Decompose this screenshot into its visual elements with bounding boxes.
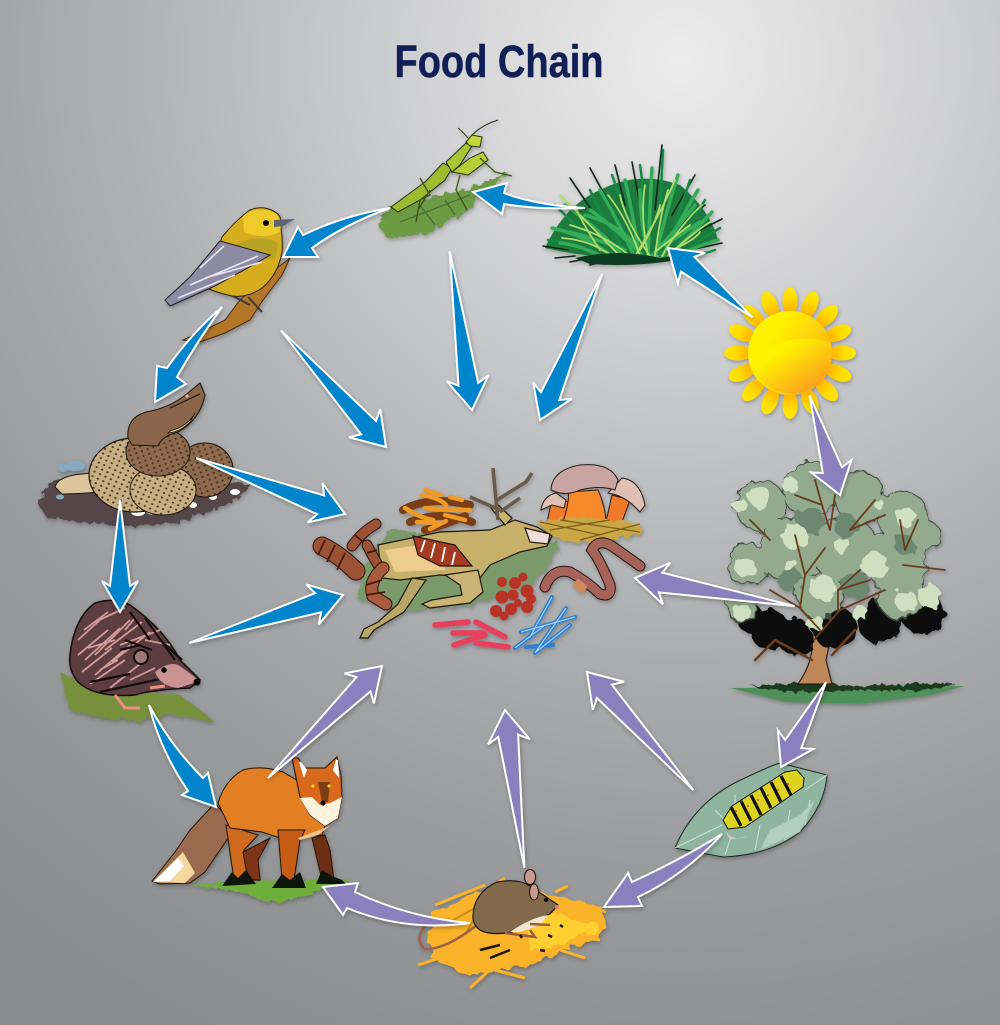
arrow: snake to hedgehog — [102, 500, 138, 612]
arrow: tree to caterpillar — [763, 673, 844, 776]
deer body — [360, 468, 552, 638]
foliage clumps — [726, 462, 944, 655]
arrow: mantis to decomposers — [429, 249, 493, 413]
red bacteria cluster — [490, 572, 536, 620]
icon: fox — [152, 757, 350, 903]
arrow: sun to tree — [790, 389, 860, 501]
worm — [545, 543, 640, 595]
maggots — [322, 524, 386, 604]
arrows: purple chain — [253, 389, 860, 925]
blue bacilli — [515, 597, 575, 653]
arrow: snake to decomposers — [189, 438, 352, 534]
nest — [537, 518, 642, 542]
arrow: bird to decomposers — [265, 316, 402, 461]
icon: snake — [37, 383, 250, 527]
center: decomposers and dead deer — [318, 465, 645, 653]
mushrooms — [541, 465, 645, 522]
branches — [750, 480, 945, 660]
ground under deer — [358, 528, 560, 610]
icon: tree — [726, 462, 965, 704]
arrow: mouse to fox — [323, 883, 470, 925]
arrow: tree to decomposers — [631, 557, 798, 627]
arrow: fox to decomposers — [253, 651, 397, 793]
arrow: hedgehog to fox — [149, 705, 216, 807]
arrows: blue chain — [102, 183, 765, 807]
arrow: caterpillar to mouse — [604, 834, 722, 907]
arrow: sun to grass — [655, 233, 765, 333]
arrow: grass to decomposers — [521, 265, 621, 428]
arrow: bird to snake — [155, 307, 222, 402]
icon: grass — [543, 145, 722, 265]
arrow: caterpillar to decomposers — [571, 658, 709, 804]
icon: bird — [165, 208, 295, 342]
arrow: mantis to bird — [283, 208, 390, 257]
title: Food Chain — [394, 36, 604, 87]
icon: leaf and caterpillar — [675, 763, 827, 857]
icon: hedgehog — [60, 600, 215, 722]
arrow: mouse to decomposers — [484, 707, 545, 870]
pink bacilli — [435, 622, 508, 647]
arrow: hedgehog to decomposers — [183, 575, 349, 663]
icon: mantis — [377, 120, 512, 238]
icon: sun — [724, 287, 856, 419]
arrow: grass to mantis — [473, 183, 585, 214]
fungus strands — [403, 490, 472, 530]
icon: mouse — [418, 870, 608, 988]
